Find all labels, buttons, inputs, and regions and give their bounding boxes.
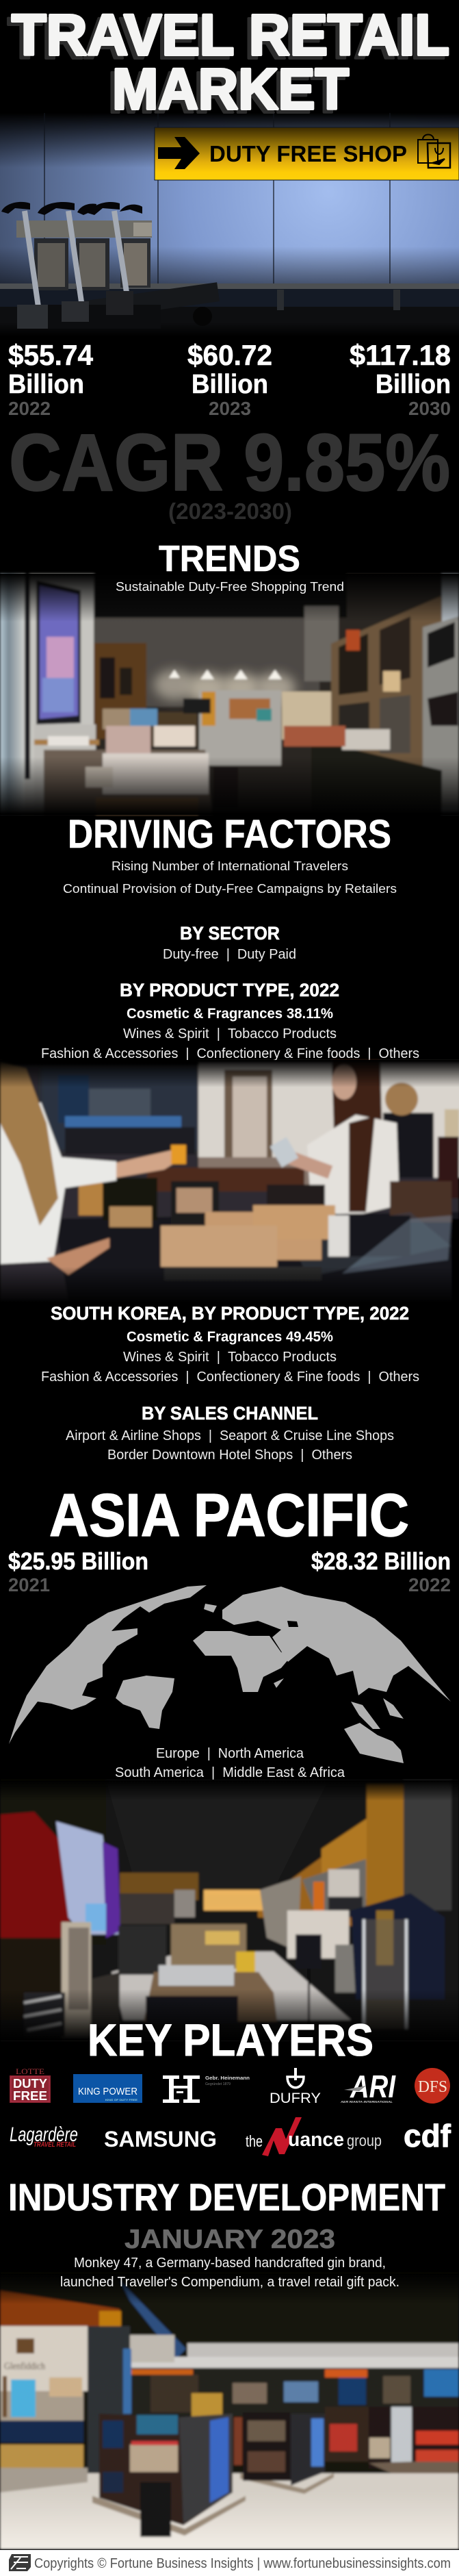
logo: the Nuance group: group: [347, 2132, 382, 2149]
by product type: Cosmetic & Fragrances 38.11%: [127, 1006, 333, 1022]
heading: trends: TRENDS: [159, 538, 300, 579]
industry development detail: Monkey 47, a Germany-based handcrafted gin brand,: [74, 2256, 386, 2271]
title: TRAVEL RETAIL: [12, 3, 449, 67]
ceiling: [120, 2294, 459, 2343]
other regions: [115, 1746, 345, 1780]
title: [8, 3, 449, 125]
other regions: South America | Middle East & Africa: [115, 1765, 345, 1780]
by product type: Fashion & Accessories | Confectionery & Fine foods | Others: [41, 1046, 419, 1061]
stat 2023: Billion: [192, 370, 268, 399]
Glenfiddich wall: [0, 2326, 88, 2391]
duty free sign: DUTY FREE SHOP: [209, 141, 407, 166]
asia pacific 2021 value: 2021: [8, 1574, 50, 1595]
heading: driving factors: DRIVING FACTORS: [68, 812, 391, 857]
heading: trends: Sustainable Duty-Free Shopping Trend: [116, 580, 344, 594]
south korea by product type: [41, 1303, 419, 1385]
asia pacific 2022 value: 2022: [408, 1574, 451, 1595]
stat 2022: Billion: [8, 370, 84, 399]
heading: key players: KEY PLAYERS: [88, 2015, 373, 2065]
by sales channel: Airport & Airline Shops | Seaport & Cruise Line Shops: [66, 1428, 394, 1443]
title: TRAVEL RETAIL: [8, 6, 445, 71]
logo: Samsung: SAMSUNG: [104, 2127, 217, 2151]
gondola 2: [234, 2412, 334, 2494]
logo: King Power: KING POWER: [78, 2086, 137, 2097]
back of store: [130, 2368, 459, 2416]
stat 2022: $55.74: [8, 339, 94, 371]
left woman: [0, 1061, 186, 1275]
photo: cosmetics store: [0, 574, 459, 815]
industry development detail: [60, 2225, 399, 2290]
CAGR: (2023-2030): [168, 498, 292, 524]
counter: [55, 1212, 459, 1301]
logo: the Nuance group: the: [246, 2132, 263, 2150]
logo: DFS: [415, 2068, 450, 2104]
logo: Lagardere: [10, 2123, 78, 2149]
logo: King Power: [73, 2074, 142, 2103]
by sales channel: [66, 1403, 394, 1463]
icon: shopping bags: [418, 134, 450, 168]
logo: ARI: ARI: [350, 2069, 396, 2104]
by product type: Wines & Spirit | Tobacco Products: [123, 1026, 337, 1041]
right shelves: [331, 596, 442, 770]
logo: the Nuance group: uance: [288, 2129, 344, 2151]
stat 2022: 2022: [8, 398, 51, 419]
gondola 3: [325, 2407, 459, 2473]
by product type: [41, 980, 419, 1061]
logo: Lotte Duty Free: FREE: [13, 2089, 47, 2103]
heading: driving factors: Continual Provision of Duty-Free Campaigns by Retailers: [63, 882, 397, 896]
logo: King Power: KING OF DUTY FREE: [105, 2099, 138, 2101]
logo: DFS: DFS: [418, 2078, 447, 2096]
other regions: Europe | North America: [156, 1746, 304, 1761]
by sector: BY SECTOR: [180, 923, 280, 944]
by sales channel: Border Downtown Hotel Shops | Others: [107, 1448, 352, 1463]
logo: Lotte Duty Free: DUTY: [13, 2077, 47, 2091]
trolleys: [1, 202, 220, 329]
logo: Lotte Duty Free: [10, 2067, 51, 2103]
title: MARKET: [108, 60, 345, 125]
stat 2023: [187, 339, 272, 419]
by sales channel: BY SALES CHANNEL: [142, 1403, 318, 1424]
heading: driving factors: [63, 812, 397, 896]
icon: arrow: [158, 137, 200, 169]
south korea by product type: Wines & Spirit | Tobacco Products: [123, 1350, 337, 1365]
logo: the Nuance group: [246, 2117, 382, 2156]
logo: Lagardere: TRAVEL RETAIL: [34, 2141, 76, 2149]
stat 2030: 2030: [408, 398, 451, 419]
right woman: [270, 1060, 399, 1215]
photo: fashion store: [0, 1780, 459, 2041]
south korea by product type: Cosmetic & Fragrances 49.45%: [127, 1329, 333, 1345]
industry development detail: launched Traveller's Compendium, a travel retail gift pack.: [60, 2275, 399, 2290]
hero photo: airport wall with sign and trolleys: [0, 113, 459, 337]
stat 2030: $117.18: [350, 339, 451, 371]
industry development detail: JANUARY 2023: [124, 2225, 335, 2254]
icon: Fortune Business Insights logo: [9, 2554, 31, 2571]
title: MARKET: [112, 57, 349, 121]
photo: duty free store: [0, 2273, 459, 2549]
world map globe: [9, 1585, 451, 1763]
asia pacific 2022 value: [311, 1548, 451, 1595]
market size stats: [8, 339, 451, 419]
stat 2022: [8, 339, 94, 419]
gondola 1: [92, 2393, 246, 2537]
photo: cosmetics counter: [0, 1060, 459, 1304]
heading: driving factors: Rising Number of International Travelers: [112, 859, 348, 873]
south korea by product type: SOUTH KOREA, BY PRODUCT TYPE, 2022: [51, 1303, 409, 1324]
logo: Gebr. Heinemann: Gebr. Heinemann: [205, 2075, 250, 2081]
stat 2030: [350, 339, 451, 419]
by sector: Duty-free | Duty Paid: [163, 947, 296, 962]
duty free sign: [155, 127, 459, 180]
poster: [36, 580, 81, 724]
logo: Lagardere: Lagardère: [10, 2123, 78, 2146]
stat 2030: Billion: [376, 370, 451, 399]
logo: Gebr. Heinemann: Gegründet 1879: [205, 2082, 231, 2086]
floor: [0, 2492, 459, 2549]
wall lamps: [154, 670, 296, 703]
by sector: [163, 923, 296, 962]
asia pacific 2021 value: $25.95 Billion: [8, 1548, 148, 1575]
heading: asia pacific: ASIA PACIFIC: [49, 1481, 409, 1549]
logo: Lotte Duty Free: LOTTE: [16, 2067, 44, 2076]
logo: cdf: cdf: [404, 2118, 451, 2154]
table of products: [34, 724, 96, 813]
by product type: BY PRODUCT TYPE, 2022: [120, 980, 339, 1000]
heading: trends: [116, 538, 344, 594]
photo: duty free store: Glenfiddich: [4, 2361, 45, 2372]
logo: Gebr. Heinemann: [163, 2075, 250, 2103]
logo: ARI: AER RIANTA INTERNATIONAL: [340, 2100, 393, 2104]
logo: Dufry: DUFRY: [270, 2091, 321, 2106]
asia pacific 2021 value: [8, 1548, 148, 1595]
footer: [0, 2549, 459, 2576]
logo: Dufry: [270, 2068, 321, 2106]
south korea by product type: Fashion & Accessories | Confectionery & Fine foods | Others: [41, 1369, 419, 1385]
stat 2023: 2023: [209, 398, 251, 419]
stat 2023: $60.72: [187, 339, 272, 371]
